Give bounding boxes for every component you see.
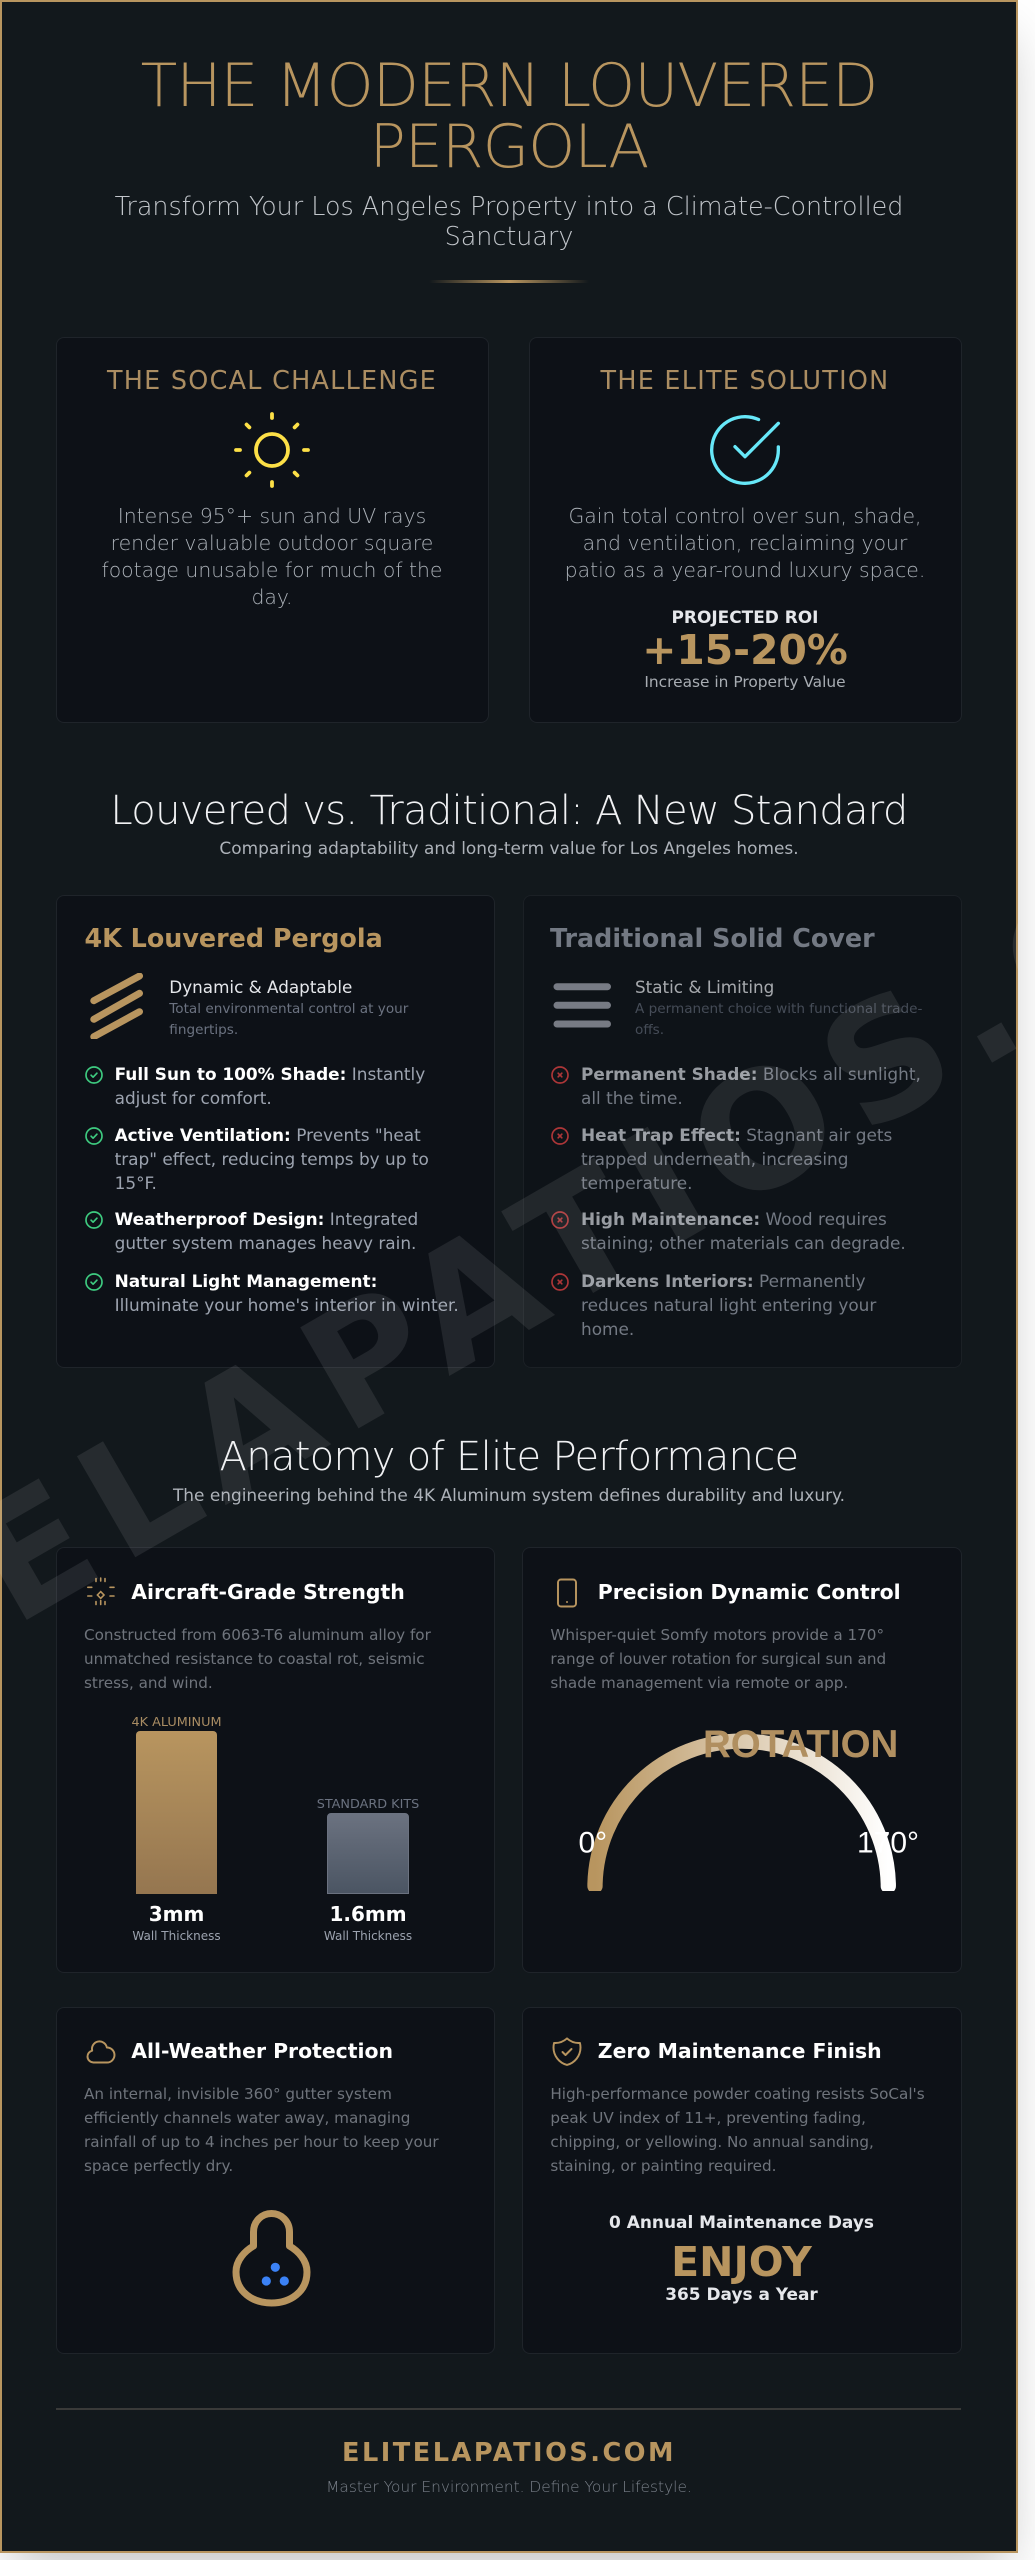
icon: x (551, 1273, 569, 1291)
icon: sun (234, 412, 310, 488)
footer (56, 2408, 961, 2518)
bar: standard kits (327, 1813, 409, 1894)
icon: x (551, 1066, 569, 1084)
panel: 4K louvered pergola (56, 895, 495, 1368)
drawback: heat trap (581, 1125, 892, 1193)
icon: angled louvers (90, 973, 143, 1039)
text: maintenance description: chipping, or yellowing. No annual sanding, (550, 2133, 874, 2151)
drawback: darkens interiors: home. (581, 1319, 634, 1339)
benefit: active ventilation: Active Ventilation: Prevents "heat (115, 1125, 421, 1145)
text: control description: Whisper-quiet Somfy motors provide a 170° (550, 1626, 884, 1644)
stat: days a year: 365 Days a Year (665, 2284, 818, 2304)
benefit: full sun to shade: Full Sun to 100% Shade: Instantly (115, 1064, 425, 1084)
text: weather description: space perfectly dry. (84, 2157, 233, 2175)
text: challenge description: render valuable outdoor square (111, 531, 433, 555)
bar label: 4K aluminum: 4K ALUMINUM (131, 1715, 222, 1730)
title: THE MODERN LOUVERED (141, 51, 877, 121)
subtitle: Transform Your Los Angeles Property into a Climate-Controlled (115, 191, 903, 221)
bar chart: wall thickness (131, 1715, 419, 1943)
drawback: high maintenance: staining; other materials can degrade. (581, 1233, 906, 1253)
icon: cloud (86, 2040, 116, 2064)
icon: solid bars (554, 983, 611, 1028)
text: weather description: An internal, invisible 360° gutter system (84, 2085, 392, 2103)
panel: traditional solid cover (523, 895, 962, 1368)
panel: the elite solution (529, 337, 962, 723)
icon: x (551, 1127, 569, 1145)
heading: challenge: THE SOCAL CHALLENGE (107, 365, 437, 395)
panel: all-weather protection (56, 2007, 495, 2354)
text: challenge description: footage unusable for much of the (102, 558, 442, 582)
text: solution description: patio as a year-round luxury space. (565, 558, 925, 582)
benefit: natural light: Natural Light Management: (115, 1271, 377, 1291)
icon: check (85, 1127, 103, 1145)
title: PERGOLA (370, 112, 648, 182)
caption: wall thickness: Wall Thickness (132, 1929, 221, 1943)
text: challenge description (102, 504, 442, 609)
title (141, 51, 877, 182)
text: solution description: Gain total control over sun, shade, (568, 504, 922, 528)
benefit: active ventilation: 15°F. (115, 1173, 157, 1193)
value: 3mm: 3mm (149, 1902, 204, 1926)
text: weather description (84, 2085, 439, 2175)
card title: Aircraft-Grade Strength (131, 1580, 405, 1604)
panel: precision dynamic control (522, 1547, 962, 1973)
drawback: heat trap: Heat Trap Effect: Stagnant air gets (581, 1125, 892, 1145)
text: strength description: unmatched resistance to coastal rot, seismic (84, 1650, 425, 1668)
section subheading: comparison: Comparing adaptability and long-term value for Los Angeles homes. (219, 838, 799, 858)
icon: mobile device (557, 1578, 577, 1608)
subtitle: Sanctuary (445, 221, 573, 251)
drawback: heat trap: temperature. (581, 1173, 693, 1193)
text: weather description: rainfall of up to 4 inches per hour to keep your (84, 2133, 439, 2151)
footer brand: ELITELAPATIOS.COM (342, 2438, 676, 2468)
drawback: darkens interiors (581, 1271, 876, 1339)
text: challenge description: Intense 95°+ sun and UV rays (118, 504, 426, 528)
card title: All-Weather Protection (131, 2039, 393, 2063)
icon: x (551, 1211, 569, 1229)
label: dynamic: Dynamic & Adaptable (169, 977, 352, 997)
subtitle (115, 191, 903, 251)
title divider (429, 280, 589, 283)
benefit: natural light: Illuminate your home's interior in winter. (115, 1295, 459, 1315)
description: static: offs. (635, 1022, 664, 1038)
gauge: 170 degree rotation: 170° (857, 1827, 919, 1860)
drawback: permanent shade: all the time. (581, 1088, 683, 1108)
benefit: natural light (115, 1271, 459, 1315)
drawback: darkens interiors: reduces natural light entering your (581, 1295, 876, 1315)
footer tagline: Master Your Environment. Define Your Lifestyle. (326, 2478, 692, 2496)
text: control description (550, 1626, 886, 1692)
ROI label: PROJECTED ROI (672, 607, 818, 627)
text: strength description (84, 1626, 431, 1692)
text: strength description: Constructed from 6063-T6 aluminum alloy for (84, 1626, 431, 1644)
description: static: A permanent choice with functional trade- (635, 1001, 922, 1017)
text: solution description: and ventilation, reclaiming your (583, 531, 907, 555)
panel: the socal challenge (56, 337, 489, 723)
text: maintenance description: staining, or painting required. (550, 2157, 776, 2175)
icon: check (85, 1066, 103, 1084)
description: static (635, 1001, 922, 1038)
drawback: high maintenance (581, 1209, 906, 1253)
panel: zero maintenance finish (522, 2007, 962, 2354)
drawback: permanent shade (581, 1064, 921, 1108)
text: maintenance description: High-performance powder coating resists SoCal's (550, 2085, 925, 2103)
benefit: weatherproof design: gutter system manages heavy rain. (115, 1233, 416, 1253)
description: dynamic (169, 1001, 408, 1038)
benefit: full sun to shade (115, 1064, 425, 1108)
description: dynamic: Total environmental control at your (169, 1001, 408, 1017)
bar: 4K aluminum (136, 1731, 217, 1894)
benefit: weatherproof design (115, 1209, 418, 1253)
icon: check (85, 1273, 103, 1291)
icon: check (85, 1211, 103, 1229)
gauge: 170 degree rotation (578, 1723, 919, 1891)
stat: maintenance days: 0 Annual Maintenance Days (609, 2212, 874, 2232)
card title: 4K Louvered Pergola (84, 923, 383, 953)
text: maintenance description (550, 2085, 925, 2175)
drawback: high maintenance: High Maintenance: Wood requires (581, 1209, 887, 1229)
section subheading: anatomy: The engineering behind the 4K Aluminum system defines durability and luxury. (173, 1485, 845, 1505)
card title: Precision Dynamic Control (598, 1580, 901, 1604)
drawback: heat trap: trapped underneath, increasing (581, 1149, 848, 1169)
ROI value: +15-20% (642, 626, 848, 674)
description: dynamic: fingertips. (169, 1022, 238, 1038)
value: 1.6mm: 1.6mm (329, 1902, 407, 1926)
panel: aircraft-grade strength (56, 1547, 495, 1973)
gauge: 170 degree rotation: 0° (578, 1827, 607, 1860)
ROI caption: Increase in Property Value (644, 673, 846, 691)
text: control description: range of louver rotation for surgical sun and (550, 1650, 886, 1668)
card title: Zero Maintenance Finish (598, 2039, 882, 2063)
icon: water drop with gutter dots (232, 2210, 310, 2306)
drawback: darkens interiors: Darkens Interiors: Permanently (581, 1271, 866, 1291)
section heading: anatomy: Anatomy of Elite Performance (220, 1434, 798, 1480)
icon: check circle (710, 415, 780, 485)
caption: wall thickness: Wall Thickness (324, 1929, 412, 1943)
benefit: full sun to shade: adjust for comfort. (115, 1088, 272, 1108)
text: solution description (565, 504, 925, 582)
text: challenge description: day. (251, 585, 293, 609)
benefit: active ventilation (114, 1125, 429, 1193)
heading: solution: THE ELITE SOLUTION (601, 365, 889, 395)
text: weather description: efficiently channels water away, managing (84, 2109, 410, 2127)
benefit: active ventilation: trap" effect, reducing temps by up to (115, 1149, 429, 1169)
text: strength description: stress, and wind. (84, 1674, 213, 1692)
section heading: comparison: Louvered vs. Traditional: A New Standard (110, 788, 908, 834)
benefit: weatherproof design: Weatherproof Design: Integrated (115, 1209, 418, 1229)
drawback: permanent shade: Permanent Shade: Blocks all sunlight, (581, 1064, 921, 1084)
text: maintenance description: peak UV index of 11+, preventing fading, (550, 2109, 866, 2127)
gauge: 170 degree rotation: ROTATION (703, 1723, 898, 1766)
label: static: Static & Limiting (635, 977, 774, 997)
card title: Traditional Solid Cover (550, 923, 875, 953)
icon: shield check (552, 2037, 582, 2066)
icon: strength burst (87, 1577, 115, 1606)
stat: enjoy: ENJOY (671, 2238, 812, 2286)
bar label: standard kits: STANDARD KITS (317, 1797, 419, 1812)
text: control description: shade management via remote or app. (550, 1674, 848, 1692)
